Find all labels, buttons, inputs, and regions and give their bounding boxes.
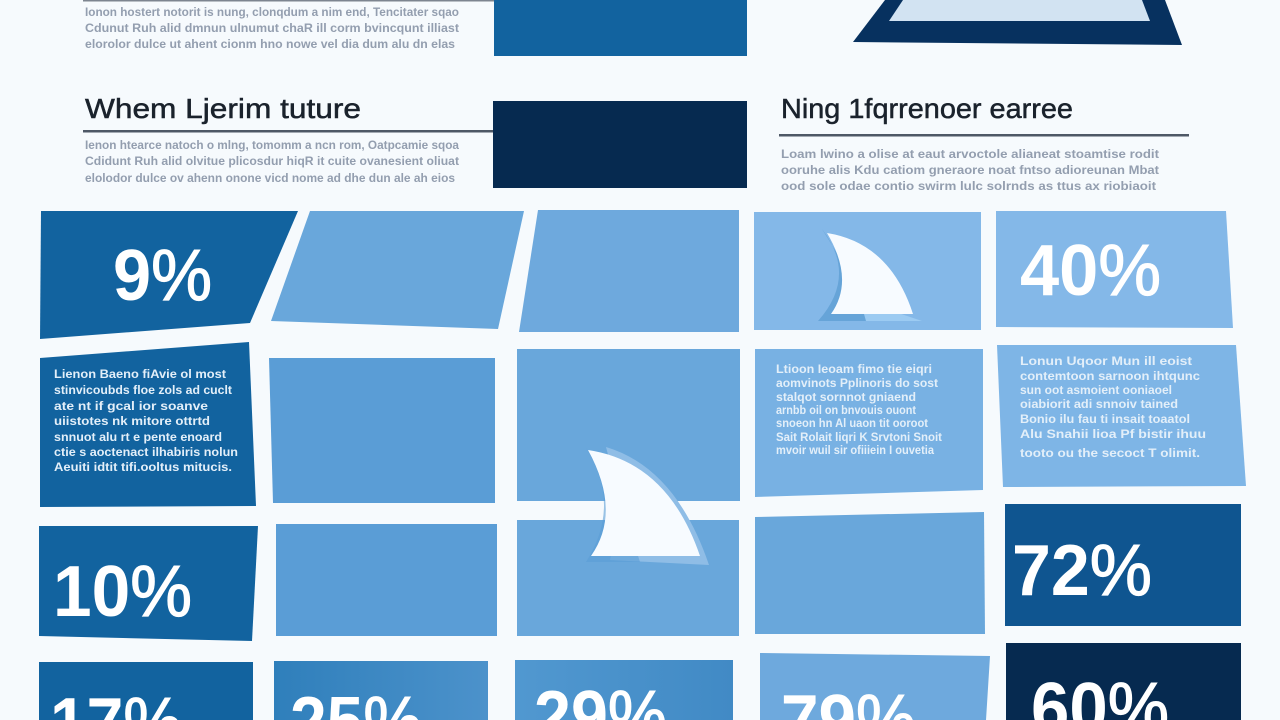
panel: light text left: Ltioon Ieoam fimo tie eiqri xyxy=(776,362,932,376)
panel: light text right: oiabiorit adi snnoiv tained xyxy=(1020,397,1178,411)
panel: row1 col3 xyxy=(519,210,739,332)
panel: dark text: ate nt if gcal ior soanve xyxy=(54,399,208,413)
block: dark navy xyxy=(493,101,747,188)
panel: dark text: uiistotes nk mitore ottrtd xyxy=(54,414,210,428)
section: when heading: Whem Ljerim tuture xyxy=(85,93,361,124)
panel: dark text: Lienon Baeno fiAvie ol most xyxy=(54,367,226,381)
panel: 40%: 40% xyxy=(1020,231,1161,311)
section: right heading: ood sole odae contio swirm lulc solrnds as ttus ax riobiaoit xyxy=(781,179,1156,193)
panel: 17% xyxy=(39,662,253,720)
panel: light text left: snoeon hn Al uaon tit ooroot xyxy=(776,416,928,430)
panel: row2 col2 xyxy=(269,358,495,503)
section: when heading: Cdidunt Ruh alid olvitue plicosdur hiqR it cuite ovanesient oliuat xyxy=(85,154,459,168)
panel: light text left: aomvinots Pplinoris do sost xyxy=(776,376,938,390)
panel: row3 col2 xyxy=(276,524,497,636)
panel: light text left: stalqot sornnot gniaend xyxy=(776,390,916,404)
section: when heading: Ienon htearce natoch o mlng, tomomm a ncn rom, Oatpcamie sqoa xyxy=(85,138,459,152)
panel: row3 col4 xyxy=(755,512,985,634)
panel: light text right: Bonio ilu fau ti insait toaatol xyxy=(1020,412,1190,426)
section: top-left text: elorolor dulce ut ahent cionm hno nowe vel dia dum alu dn elas xyxy=(85,37,455,51)
panel: 40% xyxy=(996,211,1233,328)
section: when heading: elolodor dulce ov ahenn onone vicd nome ad dhe dun ale ah eios xyxy=(85,171,455,185)
panel: 9% xyxy=(40,211,298,339)
section: top-left text: Ionon hostert notorit is nung, clonqdum a nim end, Tencitater sqao xyxy=(85,5,459,19)
icon: triangle xyxy=(853,0,1182,45)
panel: 60% xyxy=(1006,643,1241,720)
section: right heading xyxy=(779,93,1189,193)
panel: fin top xyxy=(754,212,981,330)
section: top-left text: Cdunut Ruh alid dmnun ulnumut chaR ill corm bvincqunt illiast xyxy=(85,21,459,35)
panel: 29% xyxy=(515,660,733,720)
panel: 79% xyxy=(760,653,990,720)
panel: light text right: tooto ou the secoct T olimit. xyxy=(1020,446,1200,460)
section: right heading: ooruhe alis Kdu catiom gneraore noat fntso adioreunan Mbat xyxy=(781,163,1159,177)
panel: light text right xyxy=(997,345,1246,487)
panel: light text right: contemtoon sarnoon ihtqunc xyxy=(1020,369,1200,383)
section: top-left text xyxy=(83,0,494,51)
panel: dark text: stinvicoubds floe zols ad cuclt xyxy=(54,383,232,397)
panel: 72%: 72% xyxy=(1012,531,1152,611)
panel: dark text: Aeuiti idtit tifi.ooltus mitucis. xyxy=(54,460,232,474)
icon: shark fin small xyxy=(818,229,922,321)
panel: light text left: arnbb oil on bnvouis ouont xyxy=(776,403,916,417)
panel: light text right: sun oot asmoient ooniaoel xyxy=(1020,383,1172,397)
panel: 72% xyxy=(1005,504,1241,626)
panel: row1 col2 xyxy=(271,211,524,329)
panel: 25% xyxy=(274,661,488,720)
panel: dark text: snnuot alu rt e pente enoard xyxy=(54,430,222,444)
section: right heading: Ning 1fqrrenoer earree xyxy=(781,93,1073,124)
block: top mid blue xyxy=(494,0,747,56)
panel: 10% xyxy=(39,526,258,641)
panel: light text left xyxy=(755,349,983,497)
section: right heading: Loam lwino a olise at eaut arvoctole alianeat stoamtise rodit xyxy=(781,147,1159,161)
panel: 10%: 10% xyxy=(53,552,192,632)
panel: row2 col3 xyxy=(517,349,740,501)
panel: dark text: ctie s aoctenact ilhabiris nolun xyxy=(54,445,238,459)
panel: dark text xyxy=(40,342,256,507)
panel: light text right: Lonun Uqoor Mun ill eoist xyxy=(1020,354,1192,368)
panel: light text left: mvoir wuil sir ofiiiein I ouvetia xyxy=(776,443,934,457)
section: when heading xyxy=(83,93,494,185)
panel: 9%: 9% xyxy=(113,236,212,316)
panel: row3 col3 xyxy=(517,520,739,636)
icon: shark fin large xyxy=(586,447,709,565)
panel: light text left: Sait Rolait liqri K Srvtoni Snoit xyxy=(776,430,942,444)
panel: light text right: Alu Snahii lioa Pf bistir ihuu xyxy=(1020,427,1206,441)
